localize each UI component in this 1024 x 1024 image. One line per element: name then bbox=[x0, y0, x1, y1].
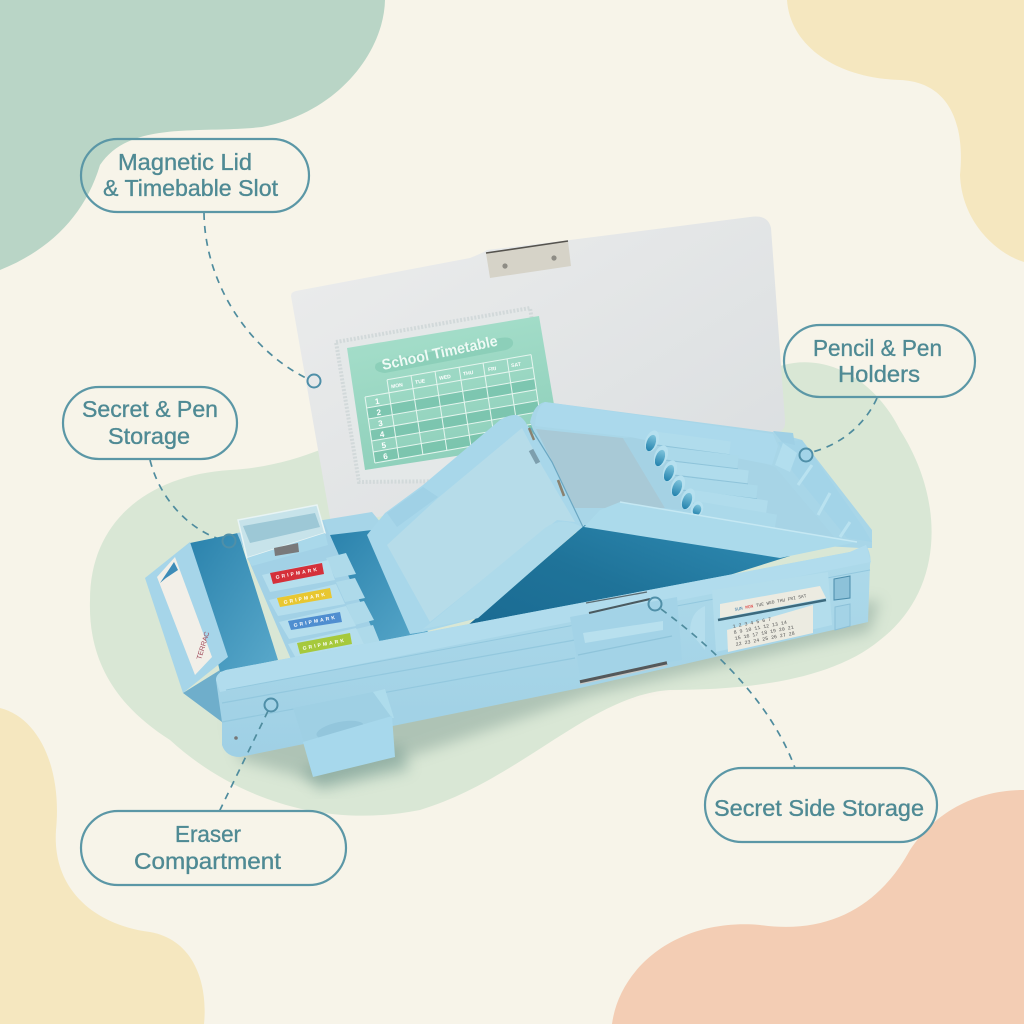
timetable grid: 6 bbox=[383, 452, 389, 461]
side calendar: 1 2 3 4 5 6 7 bbox=[732, 617, 772, 630]
connector: magnetic lid bbox=[204, 213, 306, 378]
tray floor right bbox=[700, 442, 835, 538]
folding panel inner floor bbox=[387, 428, 575, 622]
button: blue: GRIPMARK bbox=[293, 615, 336, 629]
timetable grid: THU bbox=[463, 370, 474, 378]
anchor dot: secret storage bbox=[222, 534, 236, 548]
callout: eraser compartment: Eraser bbox=[175, 821, 241, 847]
wall tab bbox=[773, 431, 795, 445]
eraser drawer bbox=[293, 689, 395, 777]
callout: pencil and pen holders: Holders bbox=[838, 361, 920, 387]
callout: secret side storage: Secret Side Storage bbox=[714, 795, 924, 821]
drop shadow bbox=[230, 600, 880, 782]
open lid bbox=[291, 216, 785, 525]
side calendar: 15 16 17 18 19 20 21 bbox=[734, 625, 794, 642]
sloped plate bbox=[584, 502, 857, 558]
side calendar bbox=[718, 586, 826, 652]
callout: secret and pen storage: Storage bbox=[108, 423, 190, 449]
tray grey floor bbox=[536, 429, 665, 508]
callout: magnetic lid bbox=[81, 139, 309, 212]
callout: secret side storage bbox=[705, 768, 937, 842]
right wall bbox=[778, 440, 872, 542]
hinges bbox=[531, 428, 583, 527]
eraser drawer shadow bbox=[300, 745, 410, 790]
anchor dot: eraser bbox=[264, 698, 278, 712]
timetable grid: 4 bbox=[379, 430, 386, 439]
anchor dot: side storage bbox=[648, 598, 662, 610]
timetable grid: 5 bbox=[381, 441, 387, 450]
body upper rim bbox=[216, 545, 871, 692]
left small well bbox=[330, 530, 428, 650]
connector: secret and pen storage bbox=[150, 460, 222, 540]
callout: magnetic lid: & Timebable Slot bbox=[103, 175, 279, 201]
right end buttons bbox=[834, 576, 850, 600]
connector: eraser compartment bbox=[219, 711, 268, 812]
blob: top left green bbox=[0, 0, 385, 270]
side calendar: SUN MON TUE WED THU FRI SAT bbox=[734, 593, 807, 613]
blob: centre green bbox=[90, 362, 932, 816]
button: red bbox=[262, 560, 335, 592]
door hinge underside bbox=[183, 670, 222, 722]
panel tab bbox=[387, 487, 438, 527]
side circular boss bbox=[690, 606, 705, 650]
door label text: TERRAC bbox=[196, 631, 211, 661]
main dark compartment bbox=[460, 525, 790, 632]
door blue logo bbox=[160, 562, 178, 583]
right side tiles bbox=[326, 553, 381, 648]
folding panel bbox=[367, 415, 583, 634]
callout: pencil and pen holders bbox=[784, 325, 975, 397]
tray top band bbox=[535, 402, 778, 465]
panel front lip bbox=[423, 522, 582, 629]
wall ribs bbox=[798, 465, 850, 537]
timetable grid: 1 bbox=[374, 397, 381, 406]
wall corner block bbox=[775, 443, 797, 472]
blob: bottom left yellow bbox=[0, 708, 205, 1024]
timetable card bbox=[347, 316, 560, 470]
button column bbox=[237, 505, 381, 664]
callout: secret and pen storage: Secret & Pen bbox=[82, 396, 218, 422]
timetable title: School Timetable bbox=[380, 333, 499, 374]
right tray bbox=[530, 402, 872, 548]
timetable grid: MON bbox=[391, 382, 404, 390]
connector: secret side storage bbox=[661, 609, 795, 768]
side calendar: 22 23 24 25 26 27 28 bbox=[735, 631, 795, 648]
metal clasps bbox=[580, 592, 667, 684]
button: blue bbox=[279, 606, 356, 639]
button: green bbox=[288, 628, 366, 662]
body centre recess bbox=[570, 597, 682, 677]
timetable grid: WED bbox=[439, 374, 452, 382]
blob: bottom right peach bbox=[612, 790, 1024, 1024]
timetable grid: 2 bbox=[376, 408, 382, 417]
pen holders bbox=[642, 428, 776, 521]
timetable grid: 3 bbox=[378, 419, 384, 428]
timetable grid bbox=[363, 355, 543, 463]
button: yellow: GRIPMARK bbox=[283, 592, 326, 606]
left compartment bbox=[190, 533, 278, 672]
lifted transparent box bbox=[238, 505, 325, 558]
side panel frame bbox=[712, 572, 832, 652]
timetable grid: SAT bbox=[511, 361, 522, 369]
door white label bbox=[157, 557, 212, 675]
anchor dot: pencil holders bbox=[800, 448, 812, 462]
callout: eraser compartment: Compartment bbox=[134, 848, 282, 874]
left door with label bbox=[145, 542, 228, 722]
callout: pencil and pen holders: Pencil & Pen bbox=[813, 335, 942, 361]
pen stand bbox=[623, 436, 702, 512]
button: green: GRIPMARK bbox=[302, 638, 345, 652]
callout: magnetic lid: Magnetic Lid bbox=[118, 149, 252, 175]
callout: eraser compartment bbox=[81, 811, 346, 885]
back strip behind button column bbox=[323, 512, 395, 552]
timetable grid: FRI bbox=[488, 366, 497, 373]
main body front bbox=[216, 545, 871, 757]
callout: secret and pen storage bbox=[63, 387, 237, 459]
lid metal clasp bbox=[486, 241, 571, 278]
button: yellow bbox=[269, 584, 345, 616]
anchor dot: lid bbox=[308, 374, 320, 388]
button: red: GRIPMARK bbox=[275, 567, 318, 581]
connector: pencil holders bbox=[812, 398, 877, 452]
blob: top right yellow bbox=[787, 0, 1024, 262]
side calendar: 8 9 10 11 12 13 14 bbox=[733, 620, 787, 636]
timetable pocket bbox=[336, 308, 558, 482]
timetable grid: TUE bbox=[415, 378, 426, 386]
